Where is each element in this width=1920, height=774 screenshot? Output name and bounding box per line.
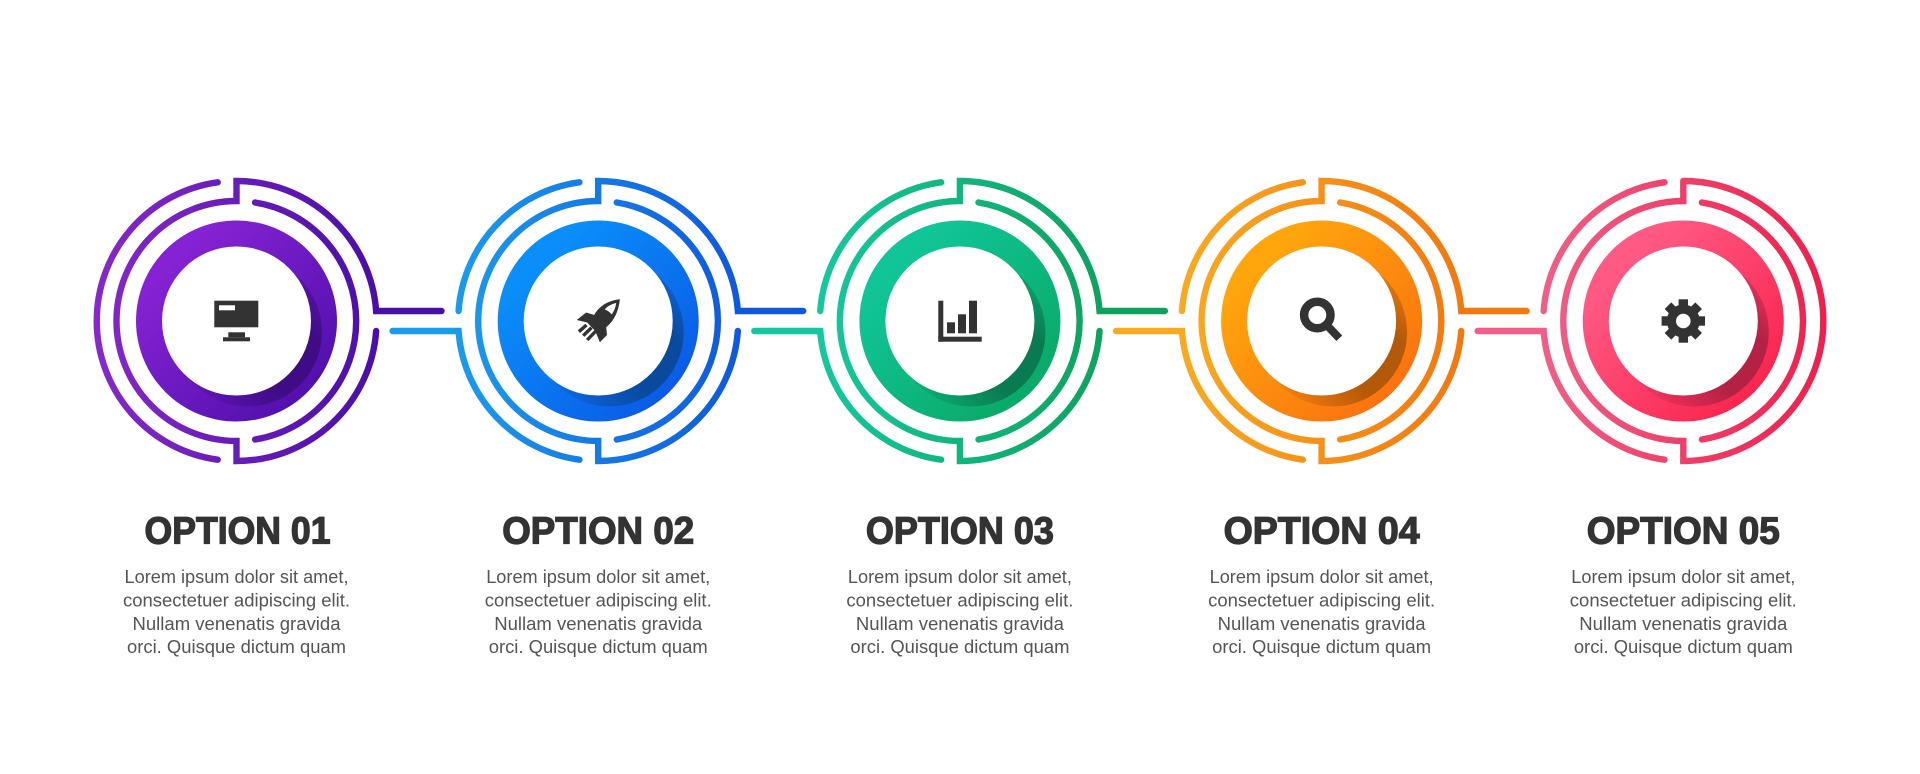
text block: orci. Quisque dictum quam [1574, 637, 1793, 657]
text block: Lorem ipsum dolor sit amet, [486, 567, 710, 587]
text block: consectetuer adipiscing elit. [1570, 590, 1797, 610]
text block: Lorem ipsum dolor sit amet, [1571, 567, 1795, 587]
heading: OPTION 03 [866, 510, 1054, 552]
line rings with connector [97, 181, 442, 461]
panel: option 04 [1116, 181, 1527, 657]
text block: Nullam venenatis gravida [132, 614, 342, 634]
text block [123, 567, 350, 657]
panel: option 01 [97, 181, 442, 657]
line rings [1478, 181, 1823, 461]
line rings with connectors [754, 181, 1165, 461]
text block: consectetuer adipiscing elit. [123, 590, 350, 610]
text block: orci. Quisque dictum quam [850, 637, 1069, 657]
line rings with connectors [1116, 181, 1527, 461]
text block [485, 567, 712, 657]
icon: rocket [577, 299, 620, 342]
panel: option 02 [393, 181, 803, 657]
text block: Lorem ipsum dolor sit amet, [848, 567, 1072, 587]
text block: consectetuer adipiscing elit. [1208, 590, 1435, 610]
line rings with connectors [393, 181, 803, 461]
gradient ring [136, 220, 337, 422]
text block: Lorem ipsum dolor sit amet, [124, 567, 348, 587]
icon: magnifier [1304, 302, 1339, 338]
heading: OPTION 02 [502, 510, 694, 552]
text block: Nullam venenatis gravida [1579, 614, 1788, 634]
text block: consectetuer adipiscing elit. [846, 590, 1073, 610]
gradient ring [498, 220, 699, 422]
text block: Nullam venenatis gravida [494, 614, 703, 634]
heading: OPTION 01 [144, 510, 330, 552]
gradient ring [1583, 220, 1784, 422]
gradient ring [859, 220, 1060, 422]
heading: OPTION 04 [1224, 510, 1420, 552]
panel: option 05 [1478, 181, 1823, 657]
heading: OPTION 05 [1587, 510, 1780, 552]
text block: orci. Quisque dictum quam [489, 637, 708, 657]
text block: Nullam venenatis gravida [1218, 614, 1427, 634]
text block: orci. Quisque dictum quam [1212, 637, 1431, 657]
text block: consectetuer adipiscing elit. [485, 590, 712, 610]
text block: orci. Quisque dictum quam [127, 637, 346, 657]
text block [1208, 567, 1435, 657]
icon: gear [1662, 299, 1705, 343]
gradient ring [1221, 220, 1422, 422]
icon: monitor [214, 301, 258, 341]
text block: Nullam venenatis gravida [856, 614, 1065, 634]
text block [1570, 567, 1797, 657]
text block [846, 567, 1073, 657]
icon: bar chart [938, 301, 982, 342]
panel: option 03 [754, 181, 1165, 657]
text block: Lorem ipsum dolor sit amet, [1210, 567, 1434, 587]
